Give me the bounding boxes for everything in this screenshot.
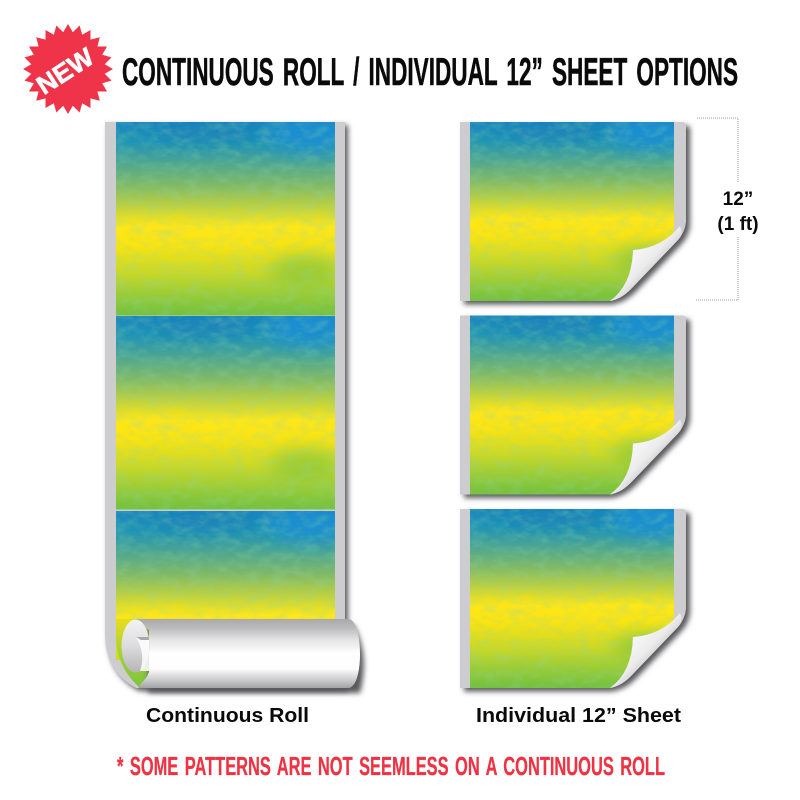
roll pattern tiles xyxy=(116,122,335,660)
pattern crescent under roll xyxy=(116,619,150,687)
badge: NEW starburst: NEW xyxy=(31,41,100,100)
label: individual sheet: Individual 12” Sheet xyxy=(476,705,681,727)
roll paper shadow xyxy=(108,125,348,691)
dimension: 12 inch xyxy=(695,118,759,300)
dimension: 12 inch: (1 ft) xyxy=(717,214,759,235)
dimension: 12 inch: 12” xyxy=(723,189,753,210)
panel: sheet 1 xyxy=(460,116,693,304)
label: continuous roll: Continuous Roll xyxy=(146,705,309,727)
rolled cylinder xyxy=(122,619,364,693)
roll paper backing xyxy=(105,122,345,688)
panel: sheet 3 xyxy=(460,503,693,692)
badge: NEW starburst xyxy=(23,24,113,114)
panel: sheet 2 xyxy=(460,310,693,498)
panel: continuous roll xyxy=(105,116,364,705)
